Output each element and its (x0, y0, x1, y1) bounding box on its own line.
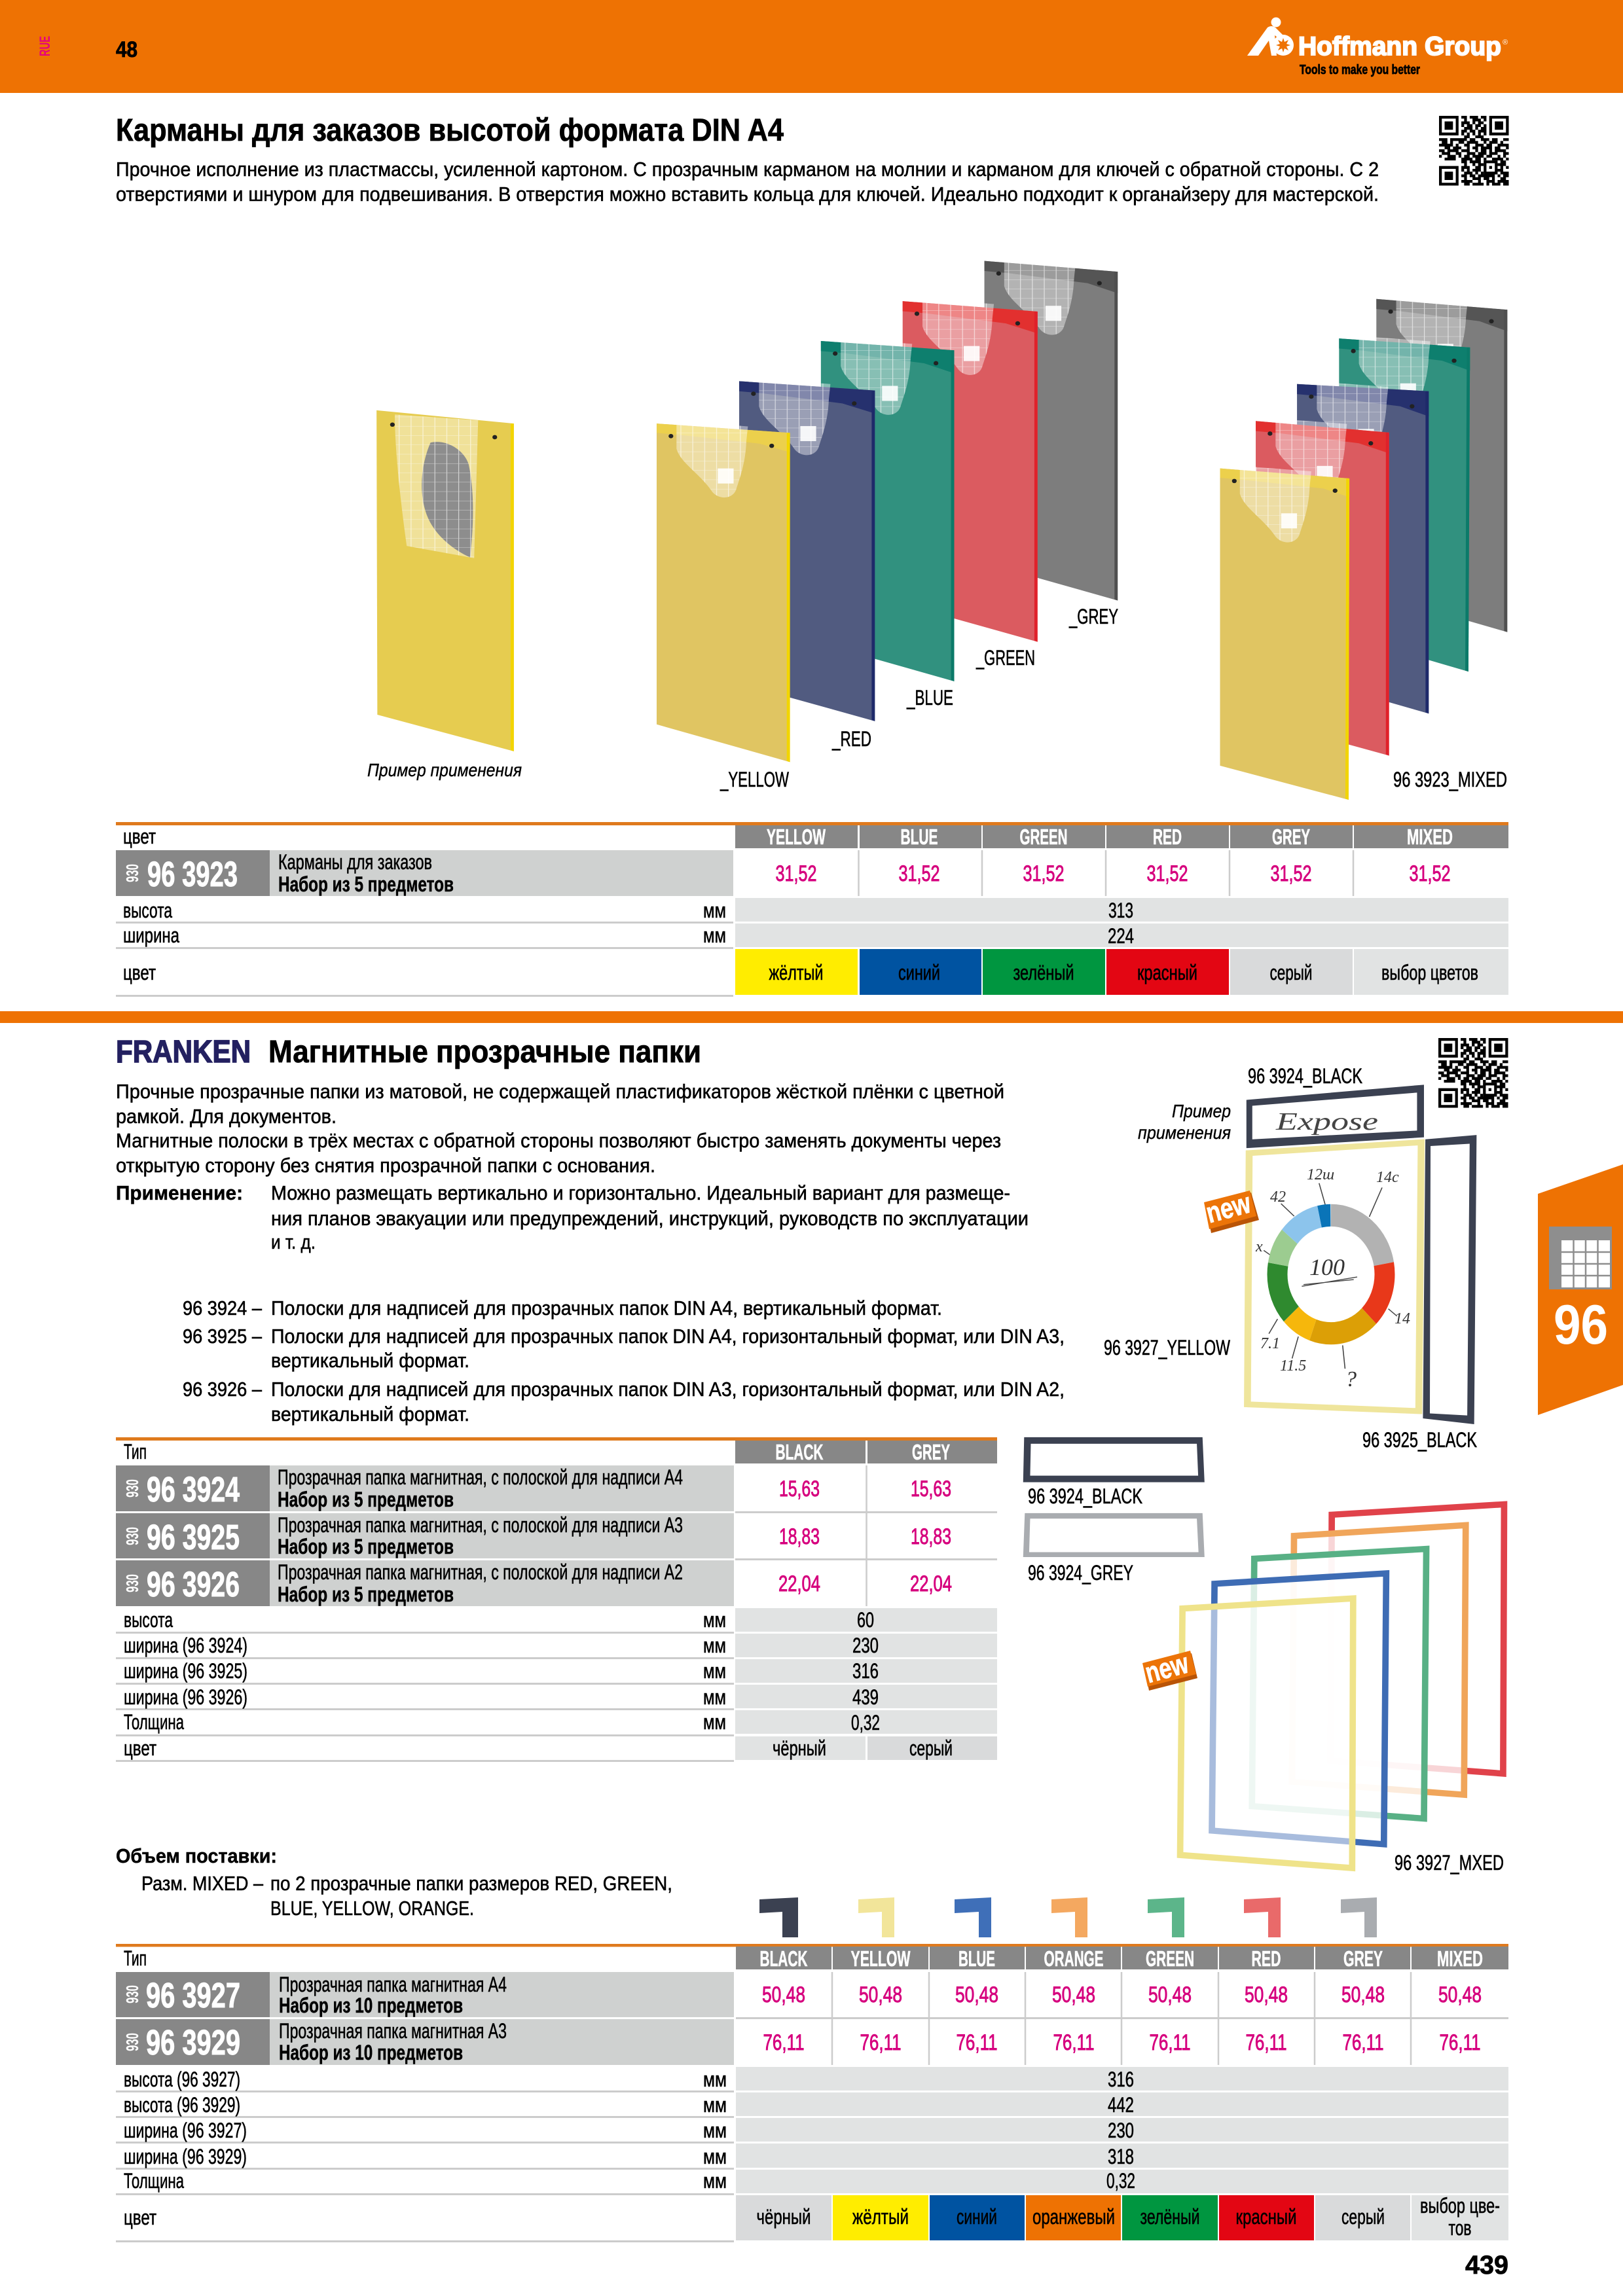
text block: article list: вертикальный формат. (271, 1403, 469, 1426)
article rows: 15,63 (911, 1477, 951, 1501)
header row: RED (1153, 825, 1182, 849)
color row: красный (1137, 961, 1197, 984)
spec rows: высота (96 3929) (124, 2093, 240, 2117)
handwritten labels (1255, 1108, 1410, 1391)
folder: blue (739, 379, 875, 721)
text block: description 1: отверстиями и шнуром для подвешивания. В отверстия можно вставить кольца для ключей. Идеально подходит к органайзеру для мастерской. (116, 183, 1379, 206)
article rows: Набор из 5 предметов (278, 1488, 454, 1511)
text block: description 2: рамкой. Для документов. (116, 1105, 337, 1128)
article rows: 96 3924 (147, 1470, 240, 1509)
captions: application example: 96 3927_YELLOW (1104, 1336, 1231, 1359)
color row: серый (1341, 2205, 1385, 2229)
spec rows: ширина (96 3926) (124, 1685, 247, 1709)
spec rows: ширина (96 3925) (124, 1659, 247, 1683)
header row: BLACK (759, 1946, 808, 1971)
article rows: 930 (122, 1479, 142, 1498)
article rows: 930 (122, 2033, 142, 2051)
spec rows: мм (703, 2119, 727, 2142)
spec rows: мм (703, 899, 726, 922)
handwritten labels: 14с (1376, 1169, 1399, 1186)
spec rows: 316 (852, 1659, 879, 1683)
article rows: Прозрачная папка магнитная А3 (279, 2019, 507, 2043)
article row: 31,52 (775, 861, 817, 886)
mixed stack: red (1256, 418, 1389, 755)
text block: description 2: Магнитные полоски в трёх местах с обратной стороны позволяют быстро заменять документы через (116, 1129, 1001, 1152)
spec rows: высота (124, 1608, 173, 1632)
text block: article list: Полоски для надписей для прозрачных папок DIN A4, горизонтальный формат, или DIN A3, (271, 1325, 1065, 1348)
article rows: 76,11 (1439, 2030, 1481, 2055)
header row: GREY (1272, 825, 1310, 849)
header row: BLUE (958, 1946, 995, 1971)
text block: article list: 96 3925 – (183, 1325, 263, 1348)
captions: application example: применения (1138, 1122, 1231, 1143)
header row (124, 1946, 1508, 1971)
spec rows: мм (703, 2169, 727, 2193)
handwritten labels: ? (1345, 1367, 1357, 1391)
table: 96 3923 (116, 822, 1508, 997)
article rows: Прозрачная папка магнитная, с полоской для надписи А3 (278, 1513, 683, 1537)
table: 96 3927-3929 (116, 1944, 1508, 2242)
spec rows: 230 (1108, 2119, 1134, 2142)
article rows: 18,83 (911, 1524, 951, 1549)
handwritten labels: x (1255, 1238, 1263, 1255)
text block: description 2: Применение: (116, 1181, 243, 1204)
spec rows: ширина (96 3927) (124, 2119, 247, 2142)
handwritten labels: 42 (1270, 1189, 1286, 1206)
spec rows: мм (703, 1659, 726, 1683)
strip black (1023, 1437, 1205, 1482)
logo: Hoffmann Group: ® (1503, 39, 1508, 46)
image captions: section 1 (367, 605, 1507, 791)
color row: чёрный (757, 2205, 811, 2229)
spec rows: мм (703, 1608, 726, 1632)
text block: article list (183, 1297, 1065, 1426)
spec rows: Толщина (124, 2169, 184, 2193)
color row (123, 949, 1508, 995)
color row: выбор цве- (1420, 2194, 1500, 2217)
header row: GREY (1343, 1946, 1383, 1971)
article row (116, 850, 1451, 896)
color row: жёлтый (852, 2205, 909, 2229)
edition code: RUE (37, 36, 53, 56)
spec rows: 318 (1108, 2145, 1134, 2168)
article row: 31,52 (898, 861, 940, 886)
spec rows: 313 (1108, 899, 1133, 922)
page number: 439 (1465, 2251, 1508, 2280)
text block: article list: Полоски для надписей для прозрачных папок DIN A4, вертикальный формат. (271, 1297, 942, 1319)
text block: description 2 (116, 1080, 1029, 1253)
article rows: 96 3929 (146, 2023, 240, 2062)
header row: GREEN (1146, 1946, 1194, 1971)
article rows: 50,48 (859, 1982, 902, 2007)
strip grey (1023, 1513, 1205, 1557)
article rows: 930 (122, 1527, 142, 1545)
header row: GREEN (1020, 825, 1067, 849)
table: 96 3924-3926 (116, 1437, 997, 1762)
header row: цвет (123, 825, 156, 848)
yellow frame (1247, 1142, 1421, 1411)
logo: Hoffmann Group (1247, 17, 1508, 77)
spec rows: 439 (852, 1685, 879, 1709)
text block: scope of delivery: Объем поставки: (116, 1844, 277, 1867)
captions: application example: 96 3925_BLACK (1362, 1428, 1477, 1452)
text block: article list: вертикальный формат. (271, 1349, 469, 1372)
article row: 930 (122, 864, 142, 882)
captions: application example: 96 3924_BLACK (1248, 1064, 1362, 1088)
spec rows (116, 2067, 1508, 2242)
article rows: Набор из 5 предметов (278, 1535, 454, 1558)
spec rows: 224 (1108, 924, 1134, 948)
mixed stack: blue (1297, 382, 1429, 713)
spec rows: мм (703, 2093, 727, 2117)
section number: 48 (116, 37, 137, 62)
header row: BLUE (901, 825, 938, 849)
caption: mixed frames: 96 3927_MXED (1395, 1851, 1504, 1874)
color row: тов (1448, 2216, 1472, 2240)
article rows: 96 3927 (146, 1976, 240, 2015)
header row: ORANGE (1044, 1946, 1104, 1971)
article rows: 50,48 (1245, 1982, 1288, 2007)
image captions: section 1: 96 3923_MIXED (1393, 768, 1507, 791)
header row: YELLOW (851, 1946, 911, 1971)
folder: yellow (657, 421, 790, 762)
text block: description 2: открытую сторону без снятия прозрачной папки с основания. (116, 1154, 655, 1177)
article rows: 96 3925 (147, 1518, 240, 1557)
image: label strips (1023, 1437, 1205, 1557)
spec rows: ширина (96 3929) (124, 2145, 247, 2168)
header row (123, 825, 1508, 849)
image: folders (376, 259, 1507, 800)
article rows: 76,11 (1342, 2030, 1384, 2055)
heading: section 2: Магнитные прозрачные папки (268, 1035, 701, 1069)
heading: section 1: Карманы для заказов высотой формата DIN A4 (116, 113, 784, 148)
header row: RED (1252, 1946, 1281, 1971)
color row (124, 2194, 1508, 2240)
spec rows: высота (123, 899, 172, 922)
color row: оранжевый (1032, 2205, 1115, 2229)
color row: синий (957, 2205, 997, 2229)
spec rows (116, 898, 1508, 997)
article row: Набор из 5 предметов (278, 872, 454, 896)
article rows: 15,63 (779, 1477, 820, 1501)
article rows: 930 (122, 1985, 142, 2003)
section divider band (0, 1011, 1623, 1023)
image captions: section 1: Пример применения (367, 760, 522, 780)
spec rows: 0,32 (851, 1711, 880, 1734)
article rows: 76,11 (1053, 2030, 1095, 2055)
captions: application example: Пример (1172, 1101, 1231, 1121)
spec rows: 316 (1108, 2068, 1134, 2091)
captions: strips (1028, 1484, 1142, 1585)
text block: scope of delivery: по 2 прозрачные папки размеров RED, GREEN, (270, 1872, 672, 1895)
text block: article list: Полоски для надписей для прозрачных папок DIN A3, горизонтальный формат, или DIN A2, (271, 1378, 1065, 1401)
article row: 31,52 (1147, 861, 1188, 886)
spec rows: серый (909, 1736, 953, 1760)
spec rows: мм (703, 2068, 727, 2091)
text block: article list: 96 3924 – (183, 1297, 263, 1319)
article rows: 50,48 (1438, 1982, 1482, 2007)
header row (124, 1440, 997, 1464)
article rows (116, 1972, 1508, 2065)
spec rows: 60 (857, 1608, 874, 1632)
article rows: Прозрачная папка магнитная А4 (279, 1973, 507, 1996)
side strip 96 3925 (1423, 1135, 1476, 1424)
article rows: 76,11 (860, 2030, 901, 2055)
captions: application example (1104, 1064, 1477, 1452)
donut chart (1277, 1215, 1385, 1333)
header row: GREY (912, 1440, 950, 1464)
logo: Hoffmann Group: Hoffmann Group (1298, 32, 1501, 61)
article row: 31,52 (1409, 861, 1451, 886)
article rows: 50,48 (1341, 1982, 1385, 2007)
header band (0, 0, 1623, 93)
mixed stack: yellow (1220, 466, 1349, 800)
image: coloured frames (1180, 1504, 1504, 1868)
article rows: Набор из 10 предметов (279, 1994, 463, 2017)
image captions: section 1: _RED (831, 727, 871, 751)
article rows: 22,04 (778, 1571, 820, 1596)
header row: MIXED (1437, 1946, 1483, 1971)
spec rows: Толщина (124, 1710, 184, 1734)
header row: MIXED (1407, 825, 1453, 849)
header row: Тип (124, 1440, 147, 1463)
text block: description 1: Прочное исполнение из пластмассы, усиленной картоном. С прозрачным карманом на молнии и карманом для ключей с обратной стороны. С 2 (116, 158, 1379, 181)
handwritten labels: 7.1 (1260, 1335, 1280, 1352)
spec rows: 230 (852, 1634, 879, 1657)
text block: scope of delivery: Разм. MIXED – (141, 1872, 264, 1895)
top strip 96 3924 (1247, 1085, 1424, 1148)
handwritten labels: 11.5 (1280, 1357, 1306, 1374)
spec rows (116, 1608, 997, 1762)
text block: description 2: и т. д. (271, 1230, 316, 1253)
captions: strips: 96 3924_GREY (1028, 1561, 1133, 1585)
color row: серый (1270, 961, 1312, 984)
article rows: 76,11 (956, 2030, 998, 2055)
article rows: 50,48 (1148, 1982, 1192, 2007)
spec rows: мм (703, 1634, 726, 1657)
color row: зелёный (1140, 2205, 1199, 2229)
badge: new (top): new (1203, 1187, 1254, 1229)
text block: scope of delivery (116, 1844, 672, 1920)
article rows: Прозрачная папка магнитная, с полоской для надписи А4 (278, 1465, 683, 1489)
image: frame application example (1247, 1085, 1476, 1424)
color row: цвет (124, 2206, 156, 2229)
spec rows: 442 (1108, 2093, 1134, 2117)
article rows: Набор из 10 предметов (279, 2041, 463, 2064)
mixed stack: green (1339, 336, 1470, 672)
article rows: 22,04 (910, 1571, 952, 1596)
article rows: 76,11 (1245, 2030, 1287, 2055)
article rows: 76,11 (1150, 2030, 1190, 2055)
spec rows: цвет (124, 1736, 156, 1760)
color row: синий (898, 961, 940, 984)
text block: description 2: Прочные прозрачные папки из матовой, не содержащей пластификаторов жёсткой плёнки с цветной (116, 1080, 1004, 1103)
color row: зелёный (1013, 961, 1074, 984)
logo: Hoffmann Group: Tools to make you better (1300, 63, 1420, 77)
mixed stack: grey (1376, 296, 1507, 632)
image captions: section 1: _GREY (1068, 605, 1118, 628)
article row: 31,52 (1023, 861, 1065, 886)
side tab: chapter 96 (1538, 1164, 1623, 1415)
spec rows: мм (703, 1710, 726, 1734)
article row: Карманы для заказов (278, 850, 432, 874)
article rows: 50,48 (955, 1982, 998, 2007)
spec rows: чёрный (773, 1736, 826, 1760)
header row: YELLOW (767, 825, 826, 849)
folder: application example (376, 410, 514, 751)
header row: BLACK (775, 1440, 824, 1464)
color row: жёлтый (769, 961, 824, 984)
handwritten labels: 12ш (1307, 1166, 1334, 1183)
captions: strips: 96 3924_BLACK (1028, 1484, 1142, 1508)
text block: description 2: Можно размещать вертикально и горизонтально. Идеальный вариант для размеще- (271, 1181, 1010, 1204)
side tab: chapter 96: 96 (1554, 1294, 1608, 1356)
article rows: 50,48 (1052, 1982, 1095, 2007)
article rows (116, 1465, 997, 1606)
image captions: section 1: _GREEN (976, 646, 1035, 670)
badge: new (bottom): new (1142, 1647, 1192, 1689)
article rows: Прозрачная папка магнитная, с полоской для надписи А2 (278, 1560, 683, 1584)
handwritten labels: Expose (1275, 1108, 1378, 1136)
folder: grey (985, 259, 1118, 601)
spec rows: ширина (96 3924) (124, 1634, 247, 1657)
article rows: 76,11 (763, 2030, 804, 2055)
icon: QR code 1 (1439, 116, 1508, 186)
folder: red (903, 298, 1038, 642)
article rows: 18,83 (779, 1524, 820, 1549)
spec rows: высота (96 3927) (124, 2068, 240, 2091)
spec rows: мм (703, 924, 726, 947)
header row: Тип (124, 1946, 147, 1970)
text block: description 1 (116, 158, 1379, 206)
handwritten labels: 100 (1309, 1254, 1345, 1280)
article rows: Набор из 5 предметов (278, 1583, 454, 1606)
logo: FRANKEN: FRANKEN (116, 1035, 251, 1069)
text block: article list: 96 3926 – (183, 1378, 263, 1401)
spec rows: мм (703, 2145, 727, 2168)
spec rows: мм (703, 1685, 726, 1709)
image captions: section 1: _BLUE (906, 686, 953, 709)
folder: green (821, 338, 954, 681)
icon: grid (1549, 1227, 1612, 1289)
color row: красный (1236, 2205, 1296, 2229)
image captions: section 1: _YELLOW (720, 768, 790, 791)
text block: scope of delivery: BLUE, YELLOW, ORANGE. (270, 1897, 474, 1920)
icons: colour corners (759, 1897, 1377, 1937)
spec rows: 0,32 (1106, 2169, 1135, 2193)
spec rows: ширина (123, 924, 179, 947)
color row: цвет (123, 961, 156, 984)
article rows: 96 3926 (147, 1565, 240, 1604)
text block: description 2: ния планов эвакуации или предупреждений, инструкций, руководств по эксплуатации (271, 1207, 1029, 1230)
handwritten labels: 14 (1395, 1310, 1410, 1327)
article row: 31,52 (1270, 861, 1312, 886)
article rows: 930 (122, 1574, 142, 1592)
color row: выбор цветов (1381, 961, 1478, 984)
icon: QR code 2 (1438, 1038, 1508, 1107)
article row: 96 3923 (147, 855, 238, 894)
article rows: 50,48 (762, 1982, 805, 2007)
